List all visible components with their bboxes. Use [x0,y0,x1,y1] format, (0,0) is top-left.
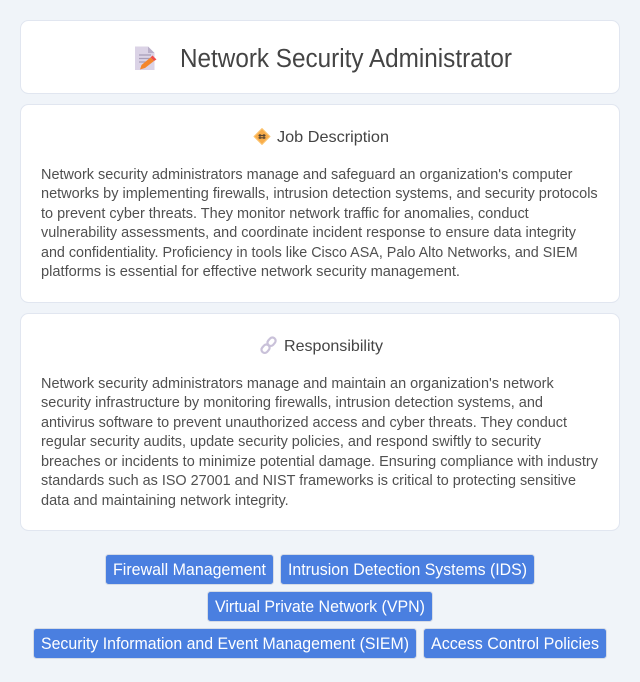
text block: job description: to prevent cyber threats. They monitor network traffic for anomalies, conduct [41,206,529,222]
tag: access control policies: Access Control Policies [431,634,599,653]
tag: virtual private network: Virtual Private Network (VPN) [215,597,425,616]
text block: responsibility [41,376,599,509]
skill tags [34,554,606,658]
text block: responsibility: data and maintaining network integrity. [41,493,289,509]
panel: title card [20,20,620,94]
tag: intrusion detection systems: Intrusion Detection Systems (IDS) [288,560,527,579]
tag: virtual private network [208,592,432,622]
text block: responsibility: standards such as ISO 27001 and NIST frameworks is critical to protecting sensitive [41,473,576,489]
text block: responsibility: breaches or incidents to minimize potential damage. Ensuring compliance with industry [41,454,599,470]
tag: SIEM [34,628,416,658]
panel: responsibility [20,314,620,530]
text block: job description: vulnerability assessments, and coordinate incident response to ensure data integrity [41,225,577,241]
icon: orange diamond sign [254,128,270,144]
text block: job description: and confidentiality. Proficiency in tools like Cisco ASA, Palo Alto Networks, and SIEM [41,245,578,261]
heading: responsibility: Responsibility [284,338,383,355]
text block: responsibility: security infrastructure by monitoring firewalls, intrusion detection systems, and [41,395,543,411]
text block: job description: platforms is essential for effective network security management. [41,264,460,280]
tag: SIEM: Security Information and Event Management (SIEM) [41,634,409,653]
text block: job description: networks by implementing firewalls, intrusion detection systems, and security protocols [41,186,598,202]
tag: intrusion detection systems [280,554,534,584]
icon: chain link [260,336,277,354]
heading: job description: Job Description [277,129,389,146]
title: Network Security Administrator [180,45,512,73]
panel: job description [20,104,620,302]
tag: firewall management [106,554,274,584]
text block: responsibility: Network security administrators manage and maintain an organization's network [41,376,554,392]
tag: firewall management: Firewall Management [113,560,266,579]
text block: responsibility: antivirus software to prevent unauthorized access and cyber threats. They conduct [41,415,567,431]
text block: job description: Network security administrators manage and safeguard an organization's computer [41,167,573,183]
text block: job description [41,167,598,280]
icon: document with pencil [135,46,156,70]
text block: responsibility: regular security audits, update security policies, and respond swiftly to security [41,434,542,450]
tag: access control policies [424,628,606,658]
